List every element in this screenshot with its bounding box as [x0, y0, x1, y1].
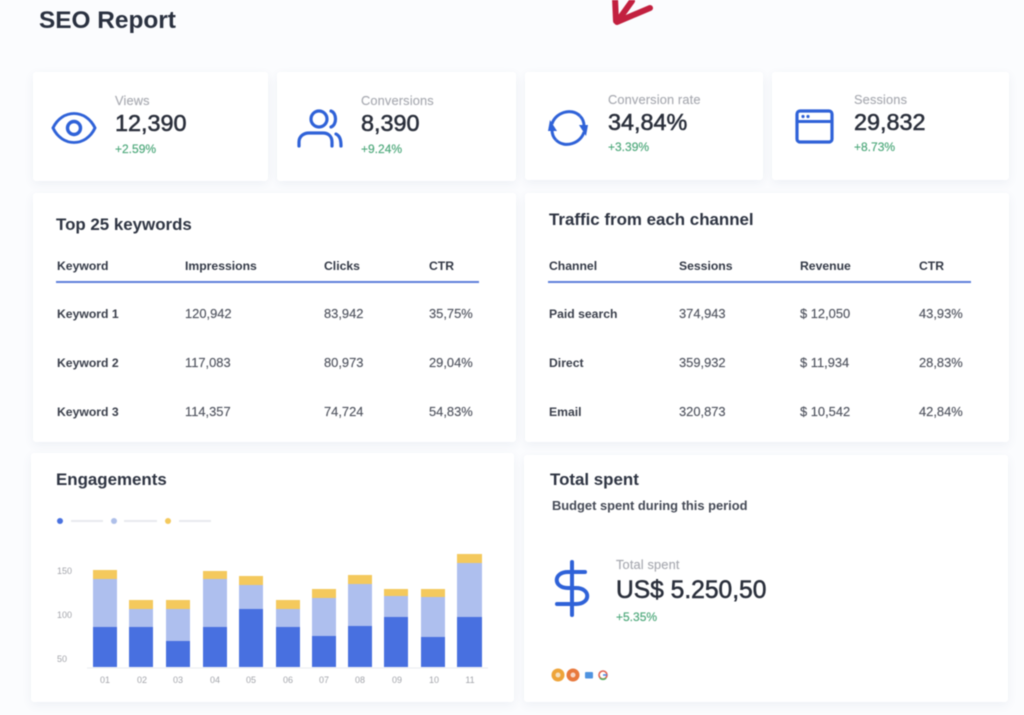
table: channels: Paid search — [549, 307, 617, 321]
value: 29,832 — [854, 109, 926, 135]
table: keywords: 117,083 — [185, 355, 231, 370]
panel: sessions — [772, 72, 1009, 180]
panel: conversion rate — [525, 72, 763, 180]
table: channels — [547, 259, 972, 419]
icon: refresh — [547, 109, 589, 147]
table: channels: Sessions — [679, 259, 733, 273]
x axis labels: 07 — [319, 675, 329, 685]
heading: Engagements — [56, 470, 167, 489]
x axis labels: 10 — [429, 675, 439, 685]
change: +5.35% — [616, 610, 657, 624]
table: keywords: 83,942 — [324, 306, 363, 321]
icon: users — [296, 108, 344, 148]
table: channels: 43,93% — [919, 306, 963, 321]
table: keywords: Keyword 2 — [57, 356, 119, 370]
table: channels: $ 10,542 — [800, 404, 850, 419]
bars — [93, 554, 482, 667]
change: +2.59% — [115, 142, 156, 156]
value: 8,390 — [361, 110, 420, 136]
x axis labels: 11 — [465, 675, 475, 685]
heading: Traffic from each channel — [549, 210, 754, 229]
x axis labels: 08 — [355, 675, 365, 685]
legend — [57, 518, 211, 524]
x axis labels: 09 — [392, 675, 402, 685]
table: keywords: Keyword — [57, 259, 108, 273]
change: +3.39% — [608, 140, 649, 154]
table: channels: 359,932 — [679, 355, 726, 370]
panel: top 25 keywords — [33, 193, 516, 442]
table: keywords: CTR — [429, 259, 454, 273]
table: keywords: 54,83% — [429, 404, 473, 419]
table: keywords: 74,724 — [324, 404, 363, 419]
label: Conversions — [361, 93, 434, 108]
value: 12,390 — [115, 110, 187, 136]
label: Total spent — [616, 557, 680, 572]
y axis labels: 100 — [57, 610, 72, 620]
baseline — [87, 668, 488, 669]
label: Conversion rate — [608, 92, 701, 107]
label: Sessions — [854, 92, 907, 107]
table: channels: 320,873 — [679, 404, 726, 419]
value: 34,84% — [608, 109, 687, 135]
table: keywords: 29,04% — [429, 355, 473, 370]
x axis labels: 04 — [210, 675, 220, 685]
icons: data sources — [550, 668, 608, 682]
table: channels: Email — [549, 405, 582, 419]
table: keywords: Keyword 1 — [57, 307, 119, 321]
icon: red arrow — [611, 0, 654, 26]
y axis labels — [57, 566, 72, 664]
table: keywords: 120,942 — [185, 306, 232, 321]
panel: engagements — [31, 453, 514, 702]
table: channels: 374,943 — [679, 306, 726, 321]
change: +8.73% — [854, 140, 895, 154]
title: SEO Report — [39, 7, 176, 34]
x axis labels — [100, 675, 475, 685]
heading: Top 25 keywords — [56, 215, 192, 234]
y axis labels: 50 — [57, 654, 67, 664]
table: keywords: Keyword 3 — [57, 405, 119, 419]
x axis labels: 03 — [173, 675, 183, 685]
icon: eye — [50, 111, 98, 145]
y axis labels: 150 — [57, 566, 72, 576]
x axis labels: 02 — [137, 675, 147, 685]
panel: traffic from each channel — [525, 193, 1009, 442]
icon: browser window — [794, 108, 834, 144]
table: keywords: Clicks — [324, 259, 360, 273]
table: channels: CTR — [919, 259, 944, 273]
panel: conversions — [277, 72, 516, 181]
table: channels: Revenue — [800, 259, 851, 273]
x axis labels: 05 — [246, 675, 256, 685]
panel: total spent — [524, 455, 1008, 702]
table: keywords — [55, 259, 480, 420]
table: keywords: Impressions — [185, 259, 257, 273]
icon: dollar — [554, 559, 590, 618]
value: US$ 5.250,50 — [616, 577, 766, 604]
table: channels: $ 11,934 — [800, 355, 849, 370]
x axis labels: 01 — [100, 675, 110, 685]
heading: Total spent — [550, 470, 639, 489]
label: Views — [115, 93, 150, 108]
table: channels: Channel — [549, 259, 597, 273]
subheading: Budget spent during this period — [552, 498, 748, 513]
table: channels: 42,84% — [919, 404, 963, 419]
table: channels: 28,83% — [919, 355, 963, 370]
panel: views — [33, 72, 268, 181]
table: channels: Direct — [549, 356, 584, 370]
chart: engagements stacked bars — [56, 517, 488, 685]
change: +9.24% — [361, 142, 402, 156]
table: keywords: 35,75% — [429, 306, 473, 321]
table: keywords: 80,973 — [324, 355, 363, 370]
table: channels: $ 12,050 — [800, 306, 850, 321]
table: keywords: 114,357 — [185, 404, 231, 419]
x axis labels: 06 — [283, 675, 293, 685]
